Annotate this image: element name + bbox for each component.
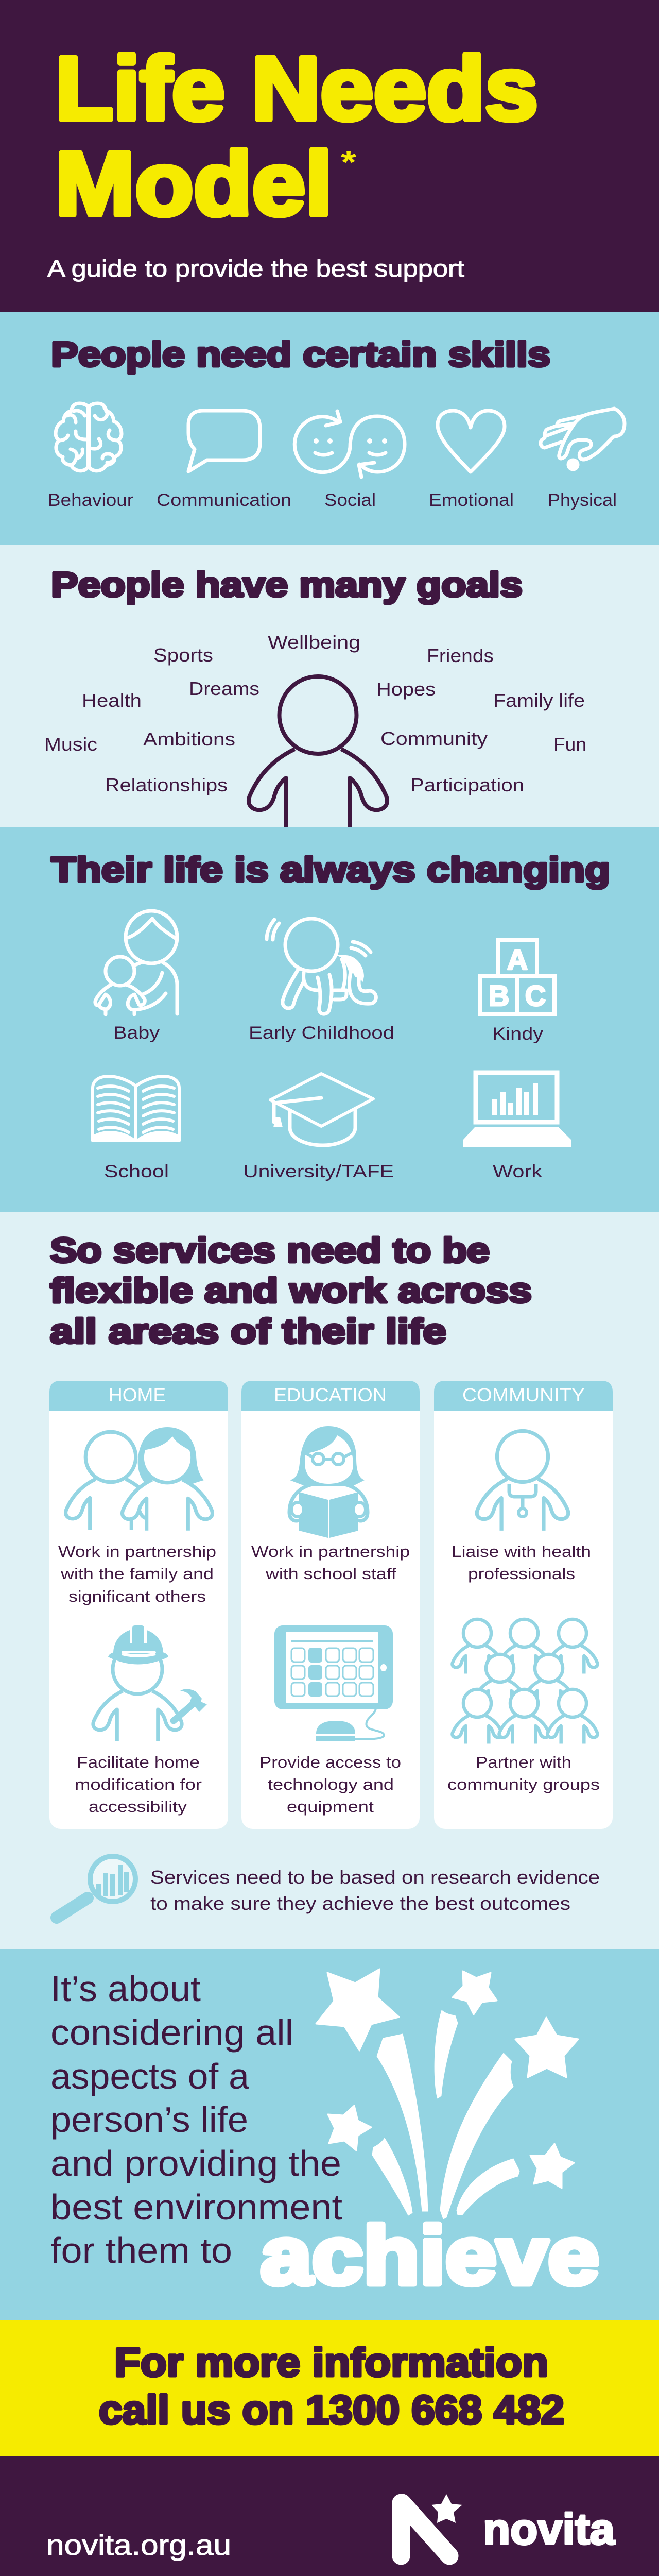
icon: alphabet blocks bbox=[480, 940, 554, 1014]
title: Life Needs Model bbox=[55, 39, 538, 234]
life stage labels bbox=[104, 1023, 543, 1181]
card text: technology: Provide access to bbox=[259, 1753, 401, 1771]
heading: So services need to be flexible: all areas of their life bbox=[50, 1312, 446, 1351]
goal words: Friends bbox=[427, 645, 494, 666]
title: Life Needs Model: Life Needs bbox=[55, 39, 538, 139]
card text: partnership with family: with the family and bbox=[60, 1565, 214, 1583]
heading: People need certain skills: People need certain skills bbox=[51, 335, 550, 374]
card text: community groups: Partner with bbox=[476, 1753, 571, 1771]
panel: footer bbox=[0, 2456, 659, 2576]
panel: title header bbox=[0, 0, 659, 312]
panel: call to action bbox=[0, 2320, 659, 2456]
life stage labels: University/TAFE bbox=[243, 1162, 394, 1181]
card text: partnership with family: significant others bbox=[68, 1587, 206, 1605]
icon: hand bbox=[541, 409, 625, 471]
card header: EDUCATION: EDUCATION bbox=[274, 1384, 387, 1405]
icon: magnifier with chart bbox=[57, 1856, 135, 1918]
icon: health professional bbox=[477, 1431, 568, 1531]
card text: health professionals bbox=[452, 1543, 591, 1583]
icon: fireworks stars and streaks bbox=[316, 1969, 578, 2219]
icon: baby bbox=[95, 911, 177, 1014]
goal words: Music bbox=[44, 734, 97, 755]
goal words: Family life bbox=[493, 690, 585, 711]
goal words: Hopes bbox=[376, 679, 436, 700]
icon: person reading bbox=[289, 1426, 368, 1538]
card: home bbox=[49, 1381, 228, 1829]
title: Life Needs Model: * bbox=[341, 145, 357, 180]
heading: So services need to be flexible: flexible and work across bbox=[50, 1271, 532, 1310]
call to action text: For more information bbox=[114, 2340, 548, 2385]
card text: partnership with school bbox=[251, 1543, 410, 1583]
card text: community groups bbox=[447, 1753, 600, 1793]
closing statement text: considering all bbox=[50, 2012, 293, 2053]
icon: tablet and mouse bbox=[274, 1625, 393, 1741]
icon: graduation cap bbox=[270, 1074, 373, 1145]
closing statement text: person’s life bbox=[50, 2099, 248, 2140]
goal words: Ambitions bbox=[143, 728, 235, 750]
goal words: Sports bbox=[153, 645, 213, 666]
skill labels: Behaviour bbox=[48, 490, 133, 510]
closing statement text: for them to bbox=[50, 2230, 232, 2270]
life stage labels: School bbox=[104, 1162, 169, 1181]
card text: health professionals: professionals bbox=[468, 1565, 575, 1583]
card header: HOME: HOME bbox=[109, 1384, 166, 1405]
skill labels: Emotional bbox=[429, 490, 514, 510]
icon: alphabet blocks: B bbox=[489, 979, 509, 1012]
research evidence text bbox=[150, 1867, 600, 1914]
heading: People have many goals: People have many goals bbox=[51, 565, 523, 604]
icon: brain bbox=[56, 403, 122, 471]
title: Life Needs Model: Model bbox=[55, 134, 332, 234]
card text: home modification: Facilitate home bbox=[77, 1753, 200, 1771]
icon: heart bbox=[438, 411, 505, 472]
card text: health professionals: Liaise with health bbox=[452, 1543, 591, 1561]
call to action text: call us on 1300 668 482 bbox=[99, 2387, 564, 2432]
goal words: Health bbox=[82, 690, 142, 711]
research evidence text: Services need to be based on research evidence bbox=[150, 1867, 600, 1888]
icon: worker with hammer bbox=[93, 1625, 207, 1741]
goal words: Wellbeing bbox=[268, 632, 360, 653]
card text: home modification: modification for bbox=[75, 1775, 202, 1793]
goal words: Community bbox=[380, 728, 488, 749]
icon: open book bbox=[93, 1076, 179, 1141]
panel: flexible services bbox=[0, 1212, 659, 1949]
life stage labels: Work bbox=[493, 1162, 543, 1181]
card: education bbox=[241, 1381, 420, 1829]
icon: social faces bbox=[294, 411, 405, 477]
icon: alphabet blocks: C bbox=[525, 979, 546, 1012]
goal words bbox=[44, 632, 586, 795]
closing statement text: It’s about bbox=[50, 1969, 201, 2009]
panel: skills bbox=[0, 312, 659, 545]
life stage labels: Baby bbox=[113, 1023, 160, 1043]
card text: partnership with school: with school staff bbox=[265, 1565, 396, 1583]
goal words: Fun bbox=[553, 734, 586, 755]
heading: So services need to be flexible bbox=[50, 1231, 532, 1351]
card text: partnership with school: Work in partnership bbox=[251, 1543, 410, 1561]
card text: partnership with family: Work in partnership bbox=[58, 1543, 216, 1561]
word: achieve: achieve bbox=[261, 2209, 599, 2301]
card text: community groups: community groups bbox=[447, 1775, 600, 1793]
skill labels: Communication bbox=[157, 490, 291, 510]
heading: Their life is always changing: Their life is always changing bbox=[51, 850, 610, 889]
card text: partnership with family bbox=[58, 1543, 216, 1605]
call to action text bbox=[99, 2340, 564, 2432]
icon: speech bubble bbox=[188, 411, 260, 471]
skill labels bbox=[48, 490, 617, 510]
logo: novita bbox=[401, 2494, 615, 2556]
icon: alphabet blocks: A bbox=[507, 943, 528, 976]
card text: home modification bbox=[75, 1753, 202, 1816]
life stage labels: Early Childhood bbox=[249, 1023, 394, 1043]
goal words: Relationships bbox=[105, 774, 228, 795]
icon: couple bbox=[66, 1427, 212, 1531]
panel: goals bbox=[0, 545, 659, 827]
website: novita.org.au bbox=[46, 2529, 231, 2561]
card header: COMMUNITY: COMMUNITY bbox=[462, 1384, 585, 1405]
panel: life stages bbox=[0, 827, 659, 1212]
skill labels: Social bbox=[324, 490, 376, 510]
card: community bbox=[434, 1381, 613, 1829]
card text: home modification: accessibility bbox=[89, 1798, 187, 1816]
icon: person outline bbox=[249, 676, 387, 827]
goal words: Dreams bbox=[189, 678, 259, 699]
subtitle: A guide to provide the best support bbox=[47, 255, 464, 282]
panel: achieve bbox=[0, 1949, 659, 2320]
research evidence text: to make sure they achieve the best outcomes bbox=[150, 1893, 570, 1914]
icon: community group bbox=[453, 1619, 597, 1743]
life stage labels: Kindy bbox=[492, 1024, 543, 1044]
goal words: Participation bbox=[410, 774, 524, 795]
closing statement text bbox=[50, 1969, 342, 2270]
closing statement text: best environment bbox=[50, 2187, 342, 2227]
closing statement text: and providing the bbox=[50, 2143, 341, 2183]
icon: crawling child bbox=[267, 919, 376, 1014]
card text: technology: equipment bbox=[287, 1798, 374, 1816]
skill labels: Physical bbox=[548, 490, 617, 510]
closing statement text: aspects of a bbox=[50, 2056, 249, 2096]
card text: technology bbox=[259, 1753, 401, 1816]
card text: technology: technology and bbox=[268, 1775, 394, 1793]
icon: laptop with chart bbox=[463, 1073, 571, 1147]
heading: So services need to be flexible: So services need to be bbox=[50, 1231, 490, 1270]
logo: novita: novita bbox=[483, 2505, 615, 2553]
